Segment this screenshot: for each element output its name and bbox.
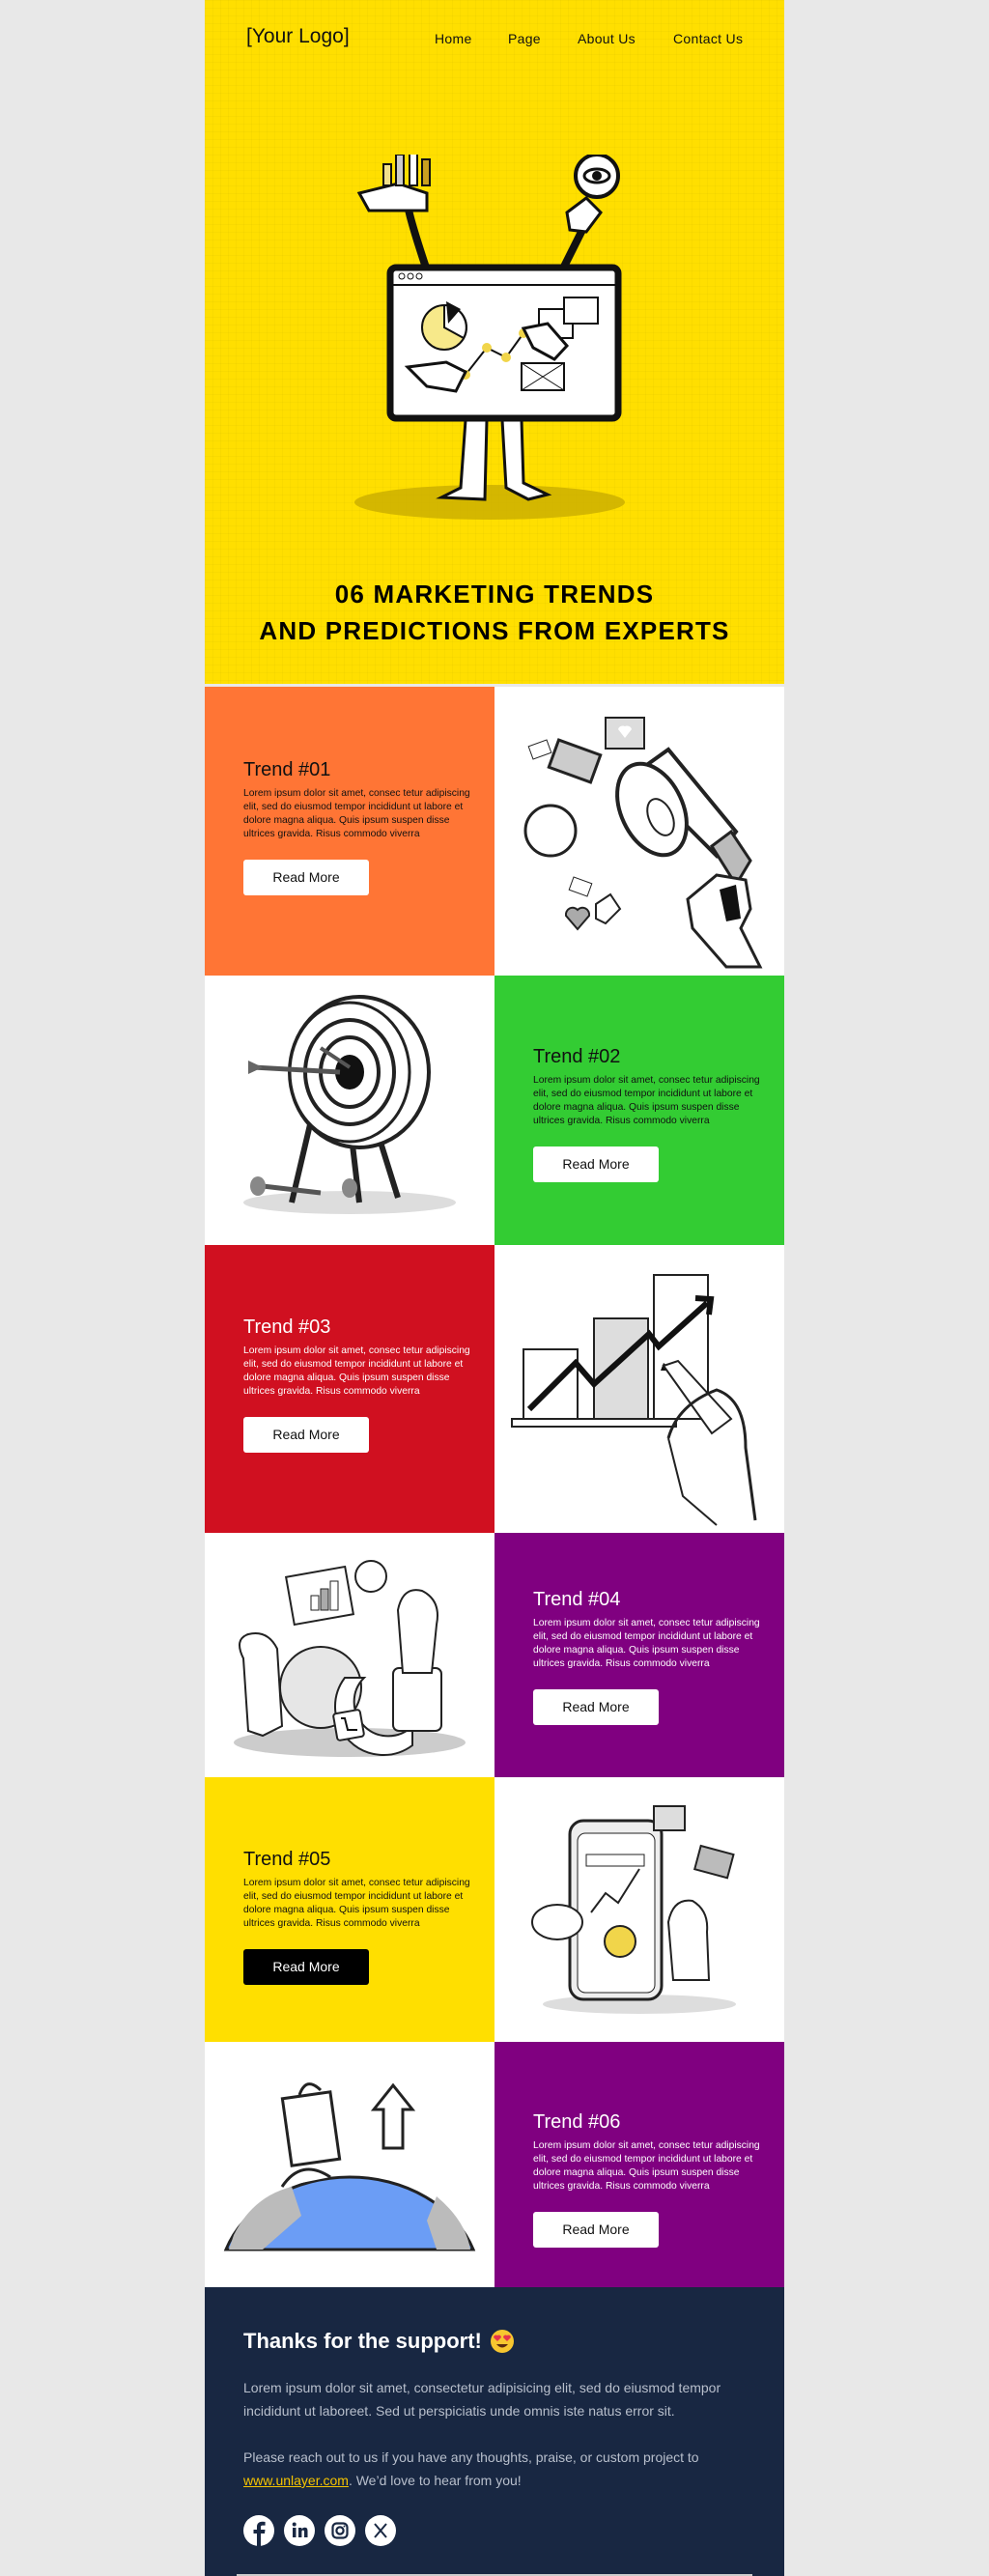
text block: trend 06: elit, sed do eiusmod tempor incididunt ut labore et <box>533 2154 752 2165</box>
text block: trend 02: elit, sed do eiusmod tempor incididunt ut labore et <box>533 1089 752 1099</box>
text block: trend 02: Trend #02 <box>533 1046 620 1067</box>
image: growth chart with pencil <box>494 1245 784 1533</box>
image: megaphone <box>494 687 784 976</box>
row 4: trend 04 <box>494 1533 784 1777</box>
text block: trend 05 <box>243 1849 470 1985</box>
text block: trend 02: Read More <box>562 1156 630 1172</box>
text block: trend 06: Trend #06 <box>533 2111 620 2133</box>
title: AND PREDICTIONS FROM EXPERTS <box>259 616 730 645</box>
text block: trend 06: Lorem ipsum dolor sit amet, consec tetur adipiscing <box>533 2140 760 2151</box>
row 1: trend 01 <box>205 687 494 976</box>
text block: trend 01: ultrices gravida. Risus commodo viverra <box>243 829 420 839</box>
text block: trend 05: Lorem ipsum dolor sit amet, consec tetur adipiscing <box>243 1878 470 1888</box>
text block: trend 05: ultrices gravida. Risus commodo viverra <box>243 1918 420 1929</box>
text block: trend 03: ultrices gravida. Risus commodo viverra <box>243 1386 420 1397</box>
social icons <box>243 2515 396 2546</box>
footer paragraph: Please reach out to us if you have any thoughts, praise, or custom project to www.unlayer.com. We’d love to hear from you! <box>243 2449 699 2488</box>
text block: trend 02: ultrices gravida. Risus commodo viverra <box>533 1116 710 1126</box>
text block: trend 01: Trend #01 <box>243 759 330 780</box>
row 2: trend 02 <box>494 976 784 1245</box>
text block: trend 06: Read More <box>562 2222 630 2237</box>
text block: trend 01: dolore magna aliqua. Quis ipsum suspen disse <box>243 815 450 826</box>
hero panel <box>205 0 784 684</box>
text block: trend 03: elit, sed do eiusmod tempor incididunt ut labore et <box>243 1359 463 1370</box>
icon: heart-eyes emoji <box>491 2330 514 2353</box>
text block: trend 01: Lorem ipsum dolor sit amet, consec tetur adipiscing <box>243 788 470 799</box>
text block: trend 06: ultrices gravida. Risus commodo viverra <box>533 2181 710 2192</box>
icon: linkedin <box>284 2515 315 2546</box>
text block: trend 05: dolore magna aliqua. Quis ipsum suspen disse <box>243 1905 450 1915</box>
footer panel <box>205 2287 784 2576</box>
text block: trend 05: Read More <box>272 1959 340 1974</box>
text block: trend 05: elit, sed do eiusmod tempor incididunt ut labore et <box>243 1891 463 1902</box>
row 3: trend 03 <box>205 1245 494 1533</box>
footer heading: Thanks for the support! <box>243 2329 482 2353</box>
image: phone with social <box>494 1777 784 2042</box>
text block: trend 03 <box>243 1316 470 1453</box>
title: 06 MARKETING TRENDS <box>335 580 654 609</box>
text block: trend 04: elit, sed do eiusmod tempor incididunt ut labore et <box>533 1631 752 1642</box>
text block: trend 04 <box>533 1589 760 1725</box>
logo: [Your Logo] <box>246 25 350 47</box>
text block: trend 05: Trend #05 <box>243 1849 330 1870</box>
text block: trend 02: dolore magna aliqua. Quis ipsum suspen disse <box>533 1102 740 1113</box>
text block: trend 03: Trend #03 <box>243 1316 330 1338</box>
footer paragraph <box>243 2380 721 2488</box>
row 5: trend 05 <box>205 1777 494 2042</box>
image: target and darts <box>205 976 494 1245</box>
nav: home: Home <box>435 31 472 46</box>
text block: trend 02 <box>533 1046 760 1182</box>
text block: trend 03: Lorem ipsum dolor sit amet, consec tetur adipiscing <box>243 1345 470 1356</box>
text block: trend 01: Read More <box>272 869 340 885</box>
text block: trend 01 <box>243 759 470 895</box>
nav: contact: Contact Us <box>673 31 743 46</box>
text block: trend 04: Lorem ipsum dolor sit amet, consec tetur adipiscing <box>533 1618 760 1628</box>
text block: trend 06 <box>533 2111 760 2248</box>
image: characters with puzzle <box>205 1533 494 1777</box>
text block: trend 04: Read More <box>562 1699 630 1714</box>
text block: trend 04: Trend #04 <box>533 1589 620 1610</box>
text block: trend 06: dolore magna aliqua. Quis ipsum suspen disse <box>533 2167 740 2178</box>
text block: trend 03: Read More <box>272 1427 340 1442</box>
nav: about: About Us <box>578 31 636 46</box>
hero illustration: analytics screen character <box>354 155 625 520</box>
row 6: trend 06 <box>494 2042 784 2287</box>
text block: trend 02: Lorem ipsum dolor sit amet, consec tetur adipiscing <box>533 1075 760 1086</box>
text block: trend 01: elit, sed do eiusmod tempor incididunt ut labore et <box>243 802 463 812</box>
icon: facebook <box>243 2515 274 2546</box>
text block: trend 03: dolore magna aliqua. Quis ipsum suspen disse <box>243 1373 450 1383</box>
text block: trend 04: dolore magna aliqua. Quis ipsum suspen disse <box>533 1645 740 1656</box>
image: globe with shopping <box>205 2042 494 2287</box>
icon: x <box>365 2515 396 2546</box>
nav: page: Page <box>508 31 541 46</box>
icon: instagram <box>325 2515 355 2546</box>
title <box>259 580 730 645</box>
footer paragraph: Lorem ipsum dolor sit amet, consectetur adipisicing elit, sed do eiusmod tempor incididunt ut laboreet. Sed ut perspiciatis unde omnis iste natus error sit. <box>243 2380 721 2419</box>
text block: trend 04: ultrices gravida. Risus commodo viverra <box>533 1658 710 1669</box>
